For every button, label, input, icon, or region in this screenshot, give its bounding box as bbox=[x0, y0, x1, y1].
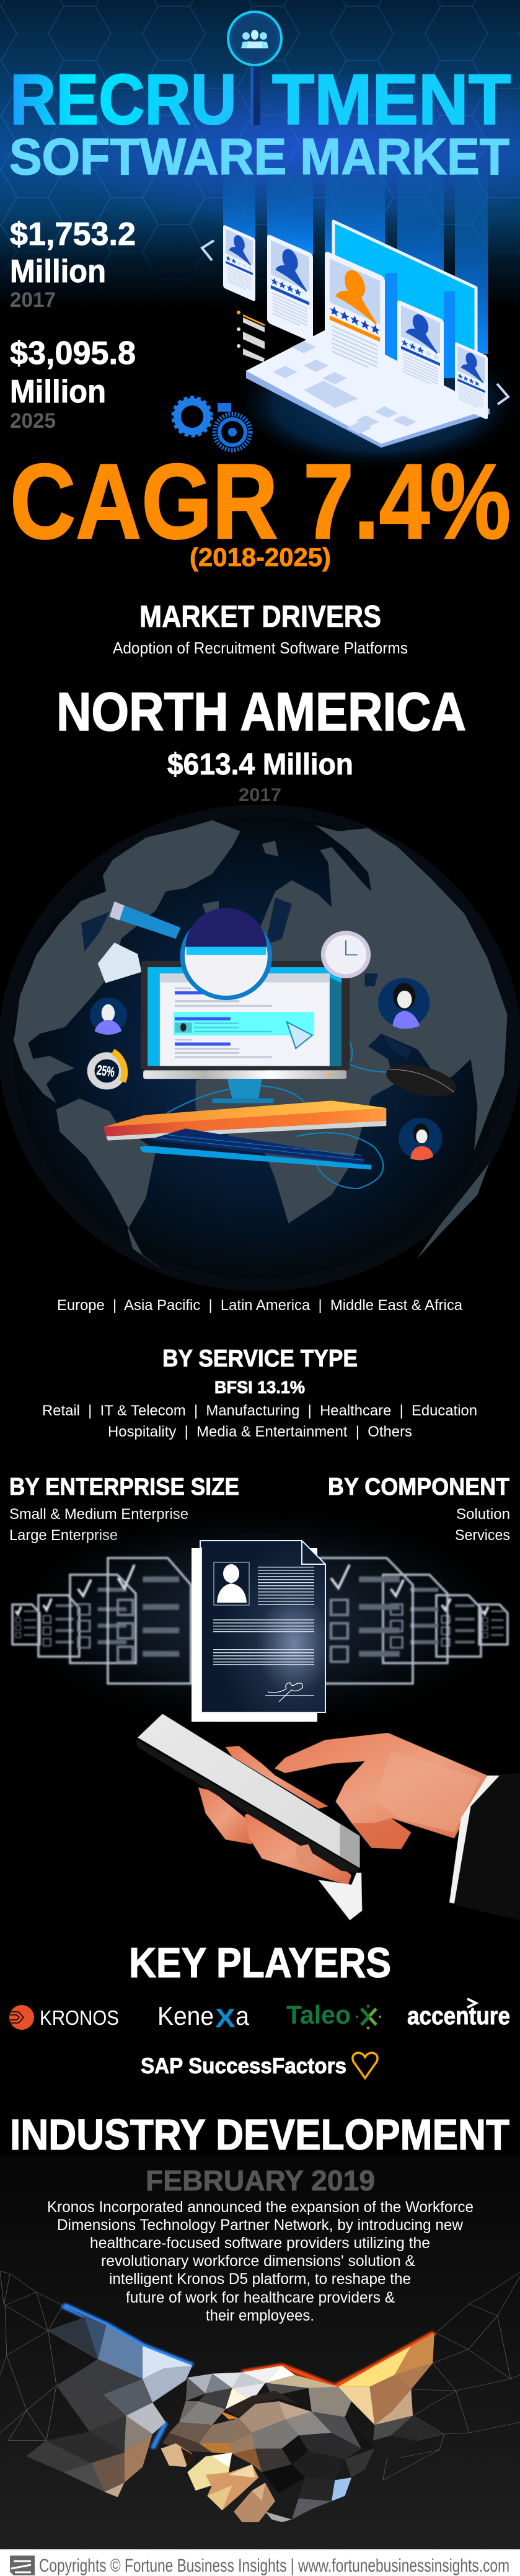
world map land masses bbox=[13, 820, 508, 1277]
text: development description: Kronos Incorporated announced the expansion of the Workforce bbox=[47, 2198, 474, 2216]
stat: market size 2025 bbox=[10, 335, 136, 433]
section: leading region: NORTH AMERICA bbox=[56, 682, 466, 742]
stat: market size 2017 bbox=[10, 216, 136, 312]
section: by component: Solution bbox=[456, 1506, 510, 1523]
orange slab bbox=[104, 1100, 386, 1127]
logo: SAP SuccessFactors: SAP SuccessFactors bbox=[141, 2054, 346, 2078]
text: development description: intelligent Kronos D5 platform, to reshape the bbox=[109, 2270, 411, 2288]
section: by service type: BY SERVICE TYPE bbox=[162, 1345, 358, 1372]
cursor arrow bbox=[287, 1022, 312, 1048]
icon: woman avatar bbox=[378, 978, 430, 1027]
icon: 25 percent donut bbox=[91, 1056, 123, 1086]
section: by enterprise size: BY ENTERPRISE SIZE bbox=[9, 1474, 239, 1500]
illustration: globe with computer bbox=[0, 804, 520, 1291]
section: by service type: Hospitality | Media & Entertainment | Others bbox=[108, 1423, 412, 1440]
text: development description: Dimensions Technology Partner Network, by introducing new bbox=[57, 2216, 464, 2234]
stat: market size 2017: 2017 bbox=[10, 288, 56, 312]
section: leading region: 2017 bbox=[239, 785, 281, 805]
panel: development background bbox=[0, 2155, 520, 2552]
section: by service type bbox=[42, 1345, 477, 1440]
left thumb behind tablet bbox=[226, 1746, 328, 1808]
icon: envelope bbox=[98, 942, 141, 983]
text: development description bbox=[47, 2198, 474, 2324]
section: by enterprise size: Large Enterprise bbox=[9, 1527, 118, 1544]
panel: header background bbox=[0, 0, 520, 310]
icon: mouse bbox=[383, 1059, 459, 1102]
title bbox=[9, 60, 511, 185]
logo: Kenexa: X bbox=[215, 2003, 236, 2034]
logo: Kenexa: Kene bbox=[157, 2001, 214, 2030]
monitor bbox=[141, 961, 350, 1070]
section: market drivers: MARKET DRIVERS bbox=[139, 600, 381, 634]
CAGR figure: (2018-2025) bbox=[190, 542, 331, 572]
section: by service type: Retail | IT & Telecom | Manufacturing | Healthcare | Education bbox=[42, 1402, 477, 1419]
stat: market size 2017: Million bbox=[10, 254, 106, 290]
stat: market size 2025: $3,095.8 bbox=[10, 335, 136, 371]
stat: market size 2025: Million bbox=[10, 374, 106, 410]
illustration: hands holding tablet bbox=[135, 1714, 520, 1920]
section: by enterprise size bbox=[9, 1474, 239, 1544]
right forearm bbox=[338, 2333, 444, 2458]
text: development description: their employees. bbox=[206, 2307, 314, 2324]
section: leading region: $613.4 Million bbox=[167, 748, 353, 781]
section: by service type: BFSI 13.1% bbox=[214, 1378, 305, 1397]
inland seas bbox=[81, 898, 411, 1059]
section: market drivers: Adoption of Recruitment Software Platforms bbox=[113, 639, 408, 657]
magnifier lens bbox=[182, 914, 270, 998]
section: by component bbox=[328, 1474, 510, 1544]
title: RECRU bbox=[10, 60, 237, 139]
logo: Kenexa: a bbox=[236, 2001, 250, 2030]
sleeve cuff left bbox=[319, 1873, 362, 1920]
cables bbox=[167, 1038, 388, 1188]
section: leading region bbox=[56, 682, 466, 805]
section: by component: Services bbox=[455, 1527, 510, 1544]
icon: Fortune Business Insights logo bbox=[10, 2556, 35, 2575]
left forearm bbox=[27, 2305, 192, 2497]
logo: Kronos: KRONOS bbox=[40, 2006, 119, 2029]
magnifier handle bbox=[110, 901, 181, 939]
illustration: globe with computer: 25% bbox=[96, 1062, 116, 1080]
icon: woman avatar small bbox=[399, 1118, 443, 1159]
icon: gears bbox=[173, 397, 250, 450]
logo: Taleo: Taleo bbox=[286, 2000, 351, 2029]
logo: Taleo bbox=[286, 2000, 381, 2030]
section: by component: BY COMPONENT bbox=[328, 1474, 509, 1500]
section: market drivers bbox=[113, 600, 408, 657]
icon: clock bbox=[321, 931, 371, 978]
icon: man avatar bbox=[90, 998, 127, 1033]
text: other regions: Europe | Asia Pacific | Latin America | Middle East & Africa bbox=[57, 1297, 463, 1314]
illustration: resume documents bbox=[0, 1500, 520, 1736]
illustration: laptop with candidate cards bbox=[202, 174, 520, 471]
logo: Kenexa bbox=[157, 2001, 250, 2034]
icon: magnifying glass with people bbox=[228, 12, 281, 125]
stat: market size 2017: $1,753.2 bbox=[10, 216, 136, 252]
clasped hands bbox=[161, 2366, 375, 2522]
title: SOFTWARE MARKET bbox=[9, 128, 509, 185]
keyboard bbox=[139, 1146, 371, 1169]
stat: market size 2025: 2025 bbox=[10, 409, 56, 433]
tablet bbox=[135, 1738, 359, 1873]
suit sleeve bbox=[454, 1773, 520, 1920]
section: by enterprise size: Small & Medium Enterprise bbox=[9, 1506, 188, 1523]
text: development description: healthcare-focused software providers utilizing the bbox=[90, 2234, 430, 2252]
illustration: low poly handshake bbox=[0, 2271, 520, 2522]
text: development description: revolutionary workforce dimensions' solution & bbox=[101, 2252, 415, 2270]
text: development date: FEBRUARY 2019 bbox=[146, 2164, 375, 2197]
text: development description: future of work for healthcare providers & bbox=[126, 2289, 395, 2306]
title: TMENT bbox=[272, 60, 511, 139]
heading: key players: KEY PLAYERS bbox=[129, 1939, 391, 1986]
right hand bbox=[275, 1733, 487, 1849]
right cuff bbox=[449, 1776, 500, 1903]
logo: Kronos bbox=[9, 2005, 119, 2030]
